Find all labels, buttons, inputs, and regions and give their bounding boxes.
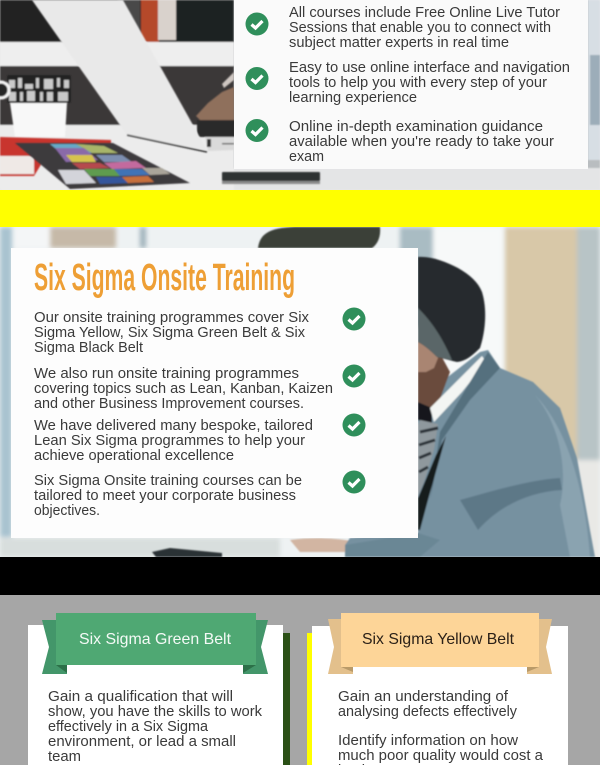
text: bespoke programmes: Lean Six Sigma programmes to help your: [34, 432, 305, 449]
icon: laptop lid: [32, 0, 207, 152]
heading: Six Sigma Green Belt: Six Sigma Green Belt: [79, 631, 232, 648]
text: online interface: Easy to use online interface and navigation: [289, 59, 570, 76]
text: tailored courses: tailored to meet your corporate business: [34, 487, 296, 504]
panel: belts background: [0, 595, 600, 765]
icon: phone on desk: [222, 172, 320, 184]
icon: check 4: [342, 470, 366, 494]
text: lean kanban kaizen: We also run onsite training programmes: [34, 365, 299, 382]
text: yellow belt description: analysing defects effectively: [338, 703, 517, 720]
icon: check 1: [342, 308, 366, 330]
text: lean kanban kaizen: covering topics such as Lean, Kanban, Kaizen: [34, 380, 333, 397]
heading: Six Sigma Yellow Belt: Six Sigma Yellow Belt: [362, 631, 515, 648]
text: green belt description: effectively in a Six Sigma: [48, 718, 209, 735]
text: live tutor sessions: All courses include Free Online Live Tutor: [289, 4, 560, 21]
jacket: [345, 350, 595, 557]
icon: check 2: [246, 67, 268, 90]
shirt and neck: [418, 356, 451, 408]
text: programme coverage: Sigma Black Belt: [34, 339, 144, 356]
text: bespoke programmes: We have delivered many bespoke, tailored: [34, 417, 313, 434]
text: yellow belt description: much poor quality would cost a: [338, 747, 544, 764]
panel: yellow belt card: [307, 613, 568, 765]
text: green belt description: environment, or lead a small: [48, 733, 236, 750]
dark inner jacket: [418, 436, 446, 530]
text: tailored courses: Six Sigma Onsite training courses can be: [34, 472, 302, 489]
icon: check 3: [246, 119, 268, 142]
icon: colour palette: [15, 143, 190, 189]
ribbon: green belt: [42, 613, 268, 674]
icon: laptop keyboard: [152, 548, 222, 557]
text: green belt description: show, you have the skills to work: [48, 703, 262, 720]
text: examination guidance: Online in-depth examination guidance: [289, 118, 543, 135]
icon: check 2: [342, 364, 366, 388]
icon: businessman: [290, 257, 595, 557]
text: tailored courses: objectives.: [34, 502, 100, 519]
panel: green belt card: [28, 613, 290, 765]
heading: Six Sigma Onsite Training: Six Sigma Onsite Training: [34, 257, 295, 299]
icon: coffee mug: [0, 75, 71, 137]
icon: check 1: [246, 12, 268, 36]
text: online interface: learning experience: [289, 89, 417, 106]
text: yellow belt description: Gain an understanding of: [338, 688, 509, 705]
icon: background person hair: [258, 227, 380, 248]
icon: red books: [0, 137, 111, 176]
text: programme coverage: Sigma Yellow, Six Sigma Green Belt & Six: [34, 324, 305, 341]
text: live tutor sessions: Sessions that enable you to connect with: [289, 19, 551, 36]
icon: hand on keyboard: [196, 72, 235, 151]
ribbon: yellow belt: [328, 613, 552, 674]
text: green belt description: team: [48, 748, 81, 765]
tie: [418, 420, 438, 496]
yellow band: [0, 190, 600, 227]
text: bespoke programmes: achieve operational excellence: [34, 447, 234, 464]
text: yellow belt description: Identify information on how: [338, 732, 518, 749]
lapel: [430, 352, 500, 500]
ear: [418, 342, 438, 372]
icon: check 3: [342, 414, 366, 436]
text: online interface: tools to help you with every step of your: [289, 74, 547, 91]
text: green belt description: Gain a qualification that will: [48, 688, 233, 705]
text: programme coverage: Our onsite training programmes cover Six: [34, 309, 309, 326]
panel: onsite training card: [11, 248, 418, 538]
hair: [418, 257, 485, 362]
panel: online features card: [234, 0, 588, 169]
text: live tutor sessions: subject matter experts in real time: [289, 34, 509, 51]
text: lean kanban kaizen: and other Business Improvement courses.: [34, 395, 304, 412]
panel: online learning photo: [0, 0, 600, 190]
text: examination guidance: exam: [289, 148, 324, 165]
black band: [0, 557, 600, 595]
text: examination guidance: available when you're ready to take your: [289, 133, 554, 150]
panel: onsite training photo: [0, 227, 600, 560]
